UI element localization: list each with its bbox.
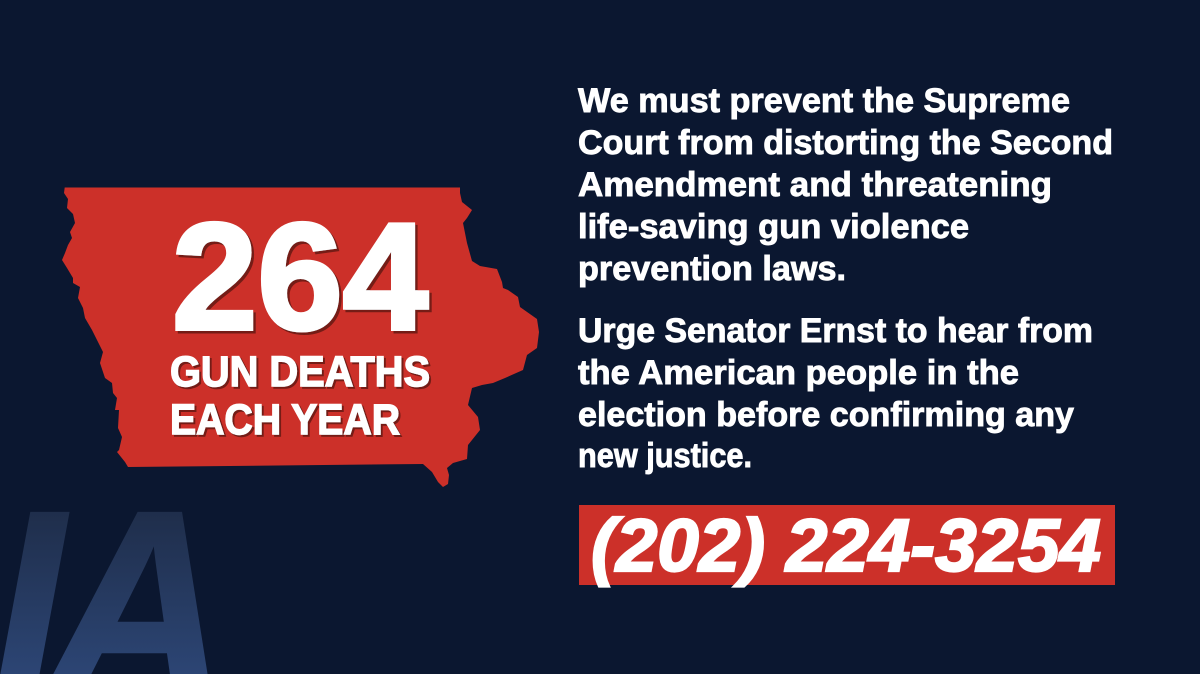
statistic: 264: 264	[172, 192, 428, 362]
text block: Supreme Court paragraph: Amendment and threatening	[578, 166, 1052, 204]
text block: Supreme Court paragraph: prevention laws.	[578, 250, 846, 288]
text block: call to action paragraph: new justice.	[578, 437, 752, 475]
label: gun deaths each year	[170, 348, 430, 444]
text block: Supreme Court paragraph: We must prevent the Supreme	[578, 82, 1070, 120]
text block: call to action paragraph: the American people in the	[578, 354, 1019, 392]
label: gun deaths each year: EACH YEAR	[170, 396, 400, 444]
text block: call to action paragraph: election before confirming any	[578, 396, 1074, 434]
text block: Supreme Court paragraph	[578, 82, 1113, 288]
text block: Supreme Court paragraph: Court from distorting the Second	[578, 124, 1113, 162]
text block: Supreme Court paragraph: life-saving gun violence	[578, 208, 969, 246]
label: gun deaths each year: GUN DEATHS	[170, 348, 430, 396]
callout: phone number: (202) 224-3254	[591, 504, 1101, 587]
text block: call to action paragraph: Urge Senator Ernst to hear from	[578, 312, 1093, 350]
text block: call to action paragraph	[578, 312, 1093, 475]
map: state of Iowa	[62, 188, 539, 487]
